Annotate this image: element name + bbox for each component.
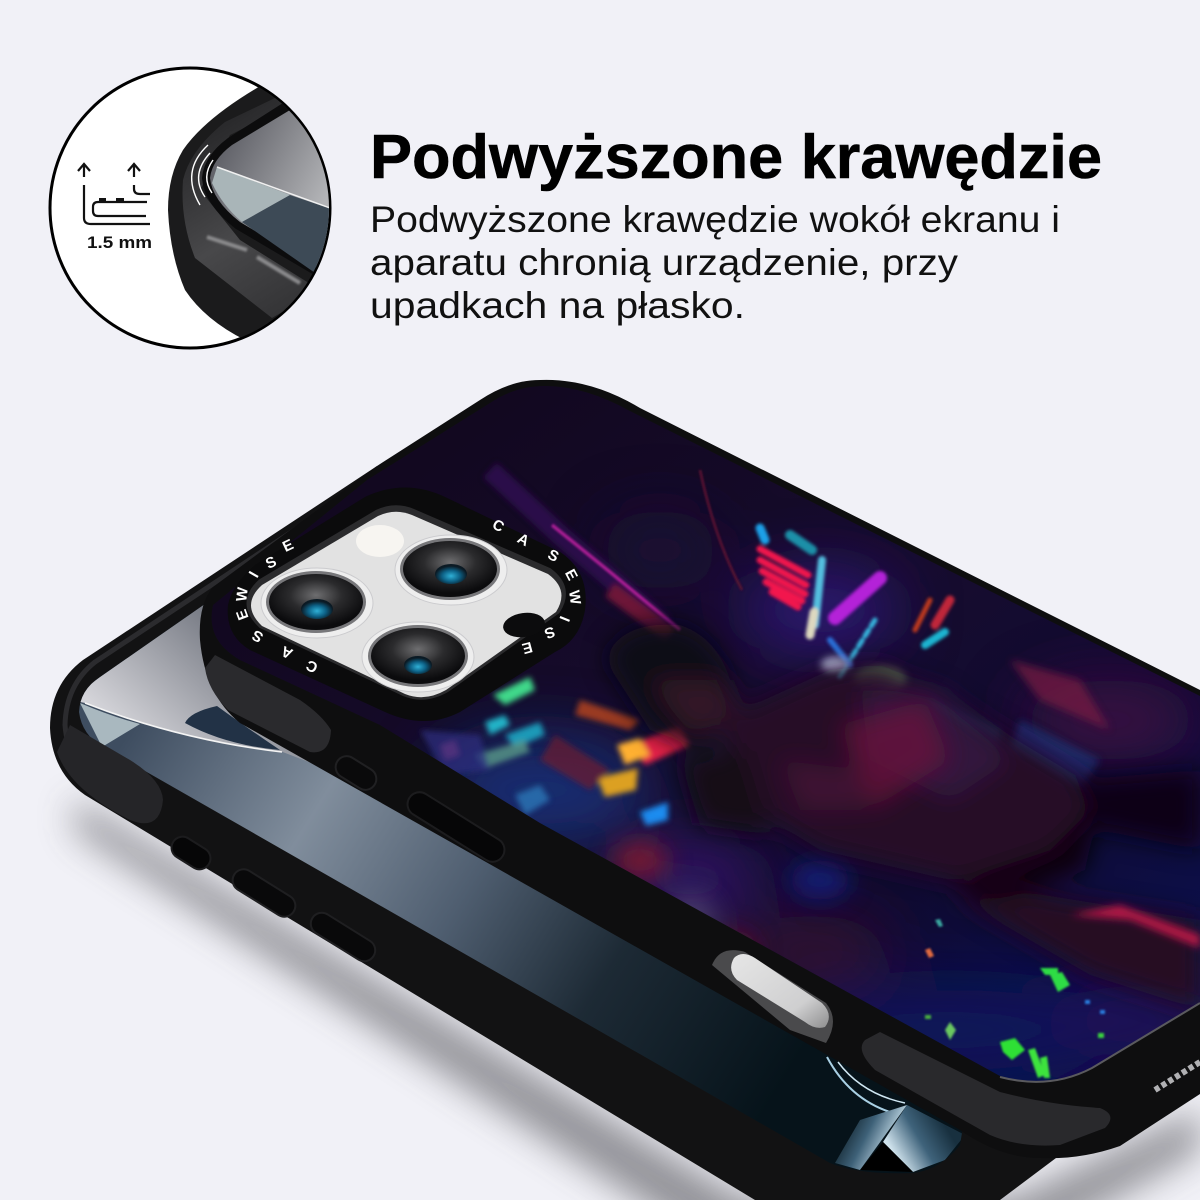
- heading: Podwyższone krawędzie: [370, 123, 1102, 192]
- speaker holes: [1155, 1062, 1200, 1090]
- background glows: [430, 510, 1200, 1070]
- ring lettering: S: [249, 626, 266, 646]
- lower phone: [50, 466, 1060, 1200]
- ring lettering: E: [280, 536, 296, 556]
- phone body: [50, 466, 1060, 1200]
- ring lettering: W: [565, 589, 584, 606]
- green reflections: [925, 919, 1105, 1078]
- volume up button: [228, 865, 300, 921]
- ring lettering: S: [545, 546, 562, 566]
- neon pole: [490, 470, 670, 635]
- camera module: [228, 488, 586, 721]
- ring lettering: E: [520, 638, 534, 657]
- figure highlights: [780, 700, 950, 810]
- artwork: [200, 380, 1200, 1100]
- ring lettering: E: [233, 607, 252, 622]
- camera window: [251, 512, 561, 697]
- ring lettering: A: [514, 530, 532, 550]
- description text: [370, 199, 1060, 326]
- neon signs: [760, 528, 950, 680]
- lidar sensor: [502, 610, 546, 640]
- upper phone: [200, 380, 1200, 1158]
- art border highlight: [1000, 1003, 1200, 1082]
- ring lettering: I: [246, 569, 263, 581]
- bumper corner patch left: [205, 655, 331, 752]
- circle base: [50, 68, 330, 348]
- edge arcs: [192, 145, 208, 205]
- screen: [210, 110, 329, 266]
- description text: aparatu chronią urządzenie, przy: [370, 242, 959, 283]
- icon: raised edge height: [78, 164, 150, 224]
- ring lettering: E: [561, 566, 581, 583]
- ring lettering: W: [233, 586, 252, 603]
- mute switch: [167, 833, 215, 873]
- city lights: [420, 677, 690, 826]
- abstract figure: [605, 624, 1200, 1010]
- camera ring: [228, 488, 586, 721]
- close-up of phone corner: [168, 87, 329, 338]
- bumper corner patch bottom: [862, 1032, 1110, 1146]
- lens top right: [395, 535, 507, 605]
- ring lettering: C: [489, 516, 507, 536]
- drop shadow: [75, 800, 1200, 1200]
- description text: upadkach na płasko.: [370, 285, 745, 326]
- description text: Podwyższone krawędzie wokół ekranu i: [370, 199, 1060, 240]
- ring lettering: [233, 516, 584, 676]
- phone screen: [79, 605, 962, 1173]
- detail circle: raised edge: [50, 60, 345, 348]
- lens left: [261, 568, 373, 638]
- ring lettering: S: [542, 623, 557, 642]
- ring lettering: I: [556, 614, 573, 624]
- mute slot: [332, 752, 380, 794]
- flash: [356, 525, 404, 557]
- ring lettering: A: [278, 642, 296, 662]
- ring inner bevel: [251, 510, 561, 695]
- frame highlight: [65, 480, 370, 785]
- silver charging button: [712, 950, 833, 1043]
- ring lettering: S: [263, 553, 279, 573]
- case bumper: [200, 380, 1200, 1158]
- label: 1.5 mm: 1.5 mm: [87, 233, 152, 252]
- bumper patch: [57, 725, 163, 823]
- ring lettering: C: [303, 656, 321, 676]
- lens bottom: [362, 622, 474, 692]
- volume down button: [307, 909, 379, 965]
- side button: [403, 788, 509, 866]
